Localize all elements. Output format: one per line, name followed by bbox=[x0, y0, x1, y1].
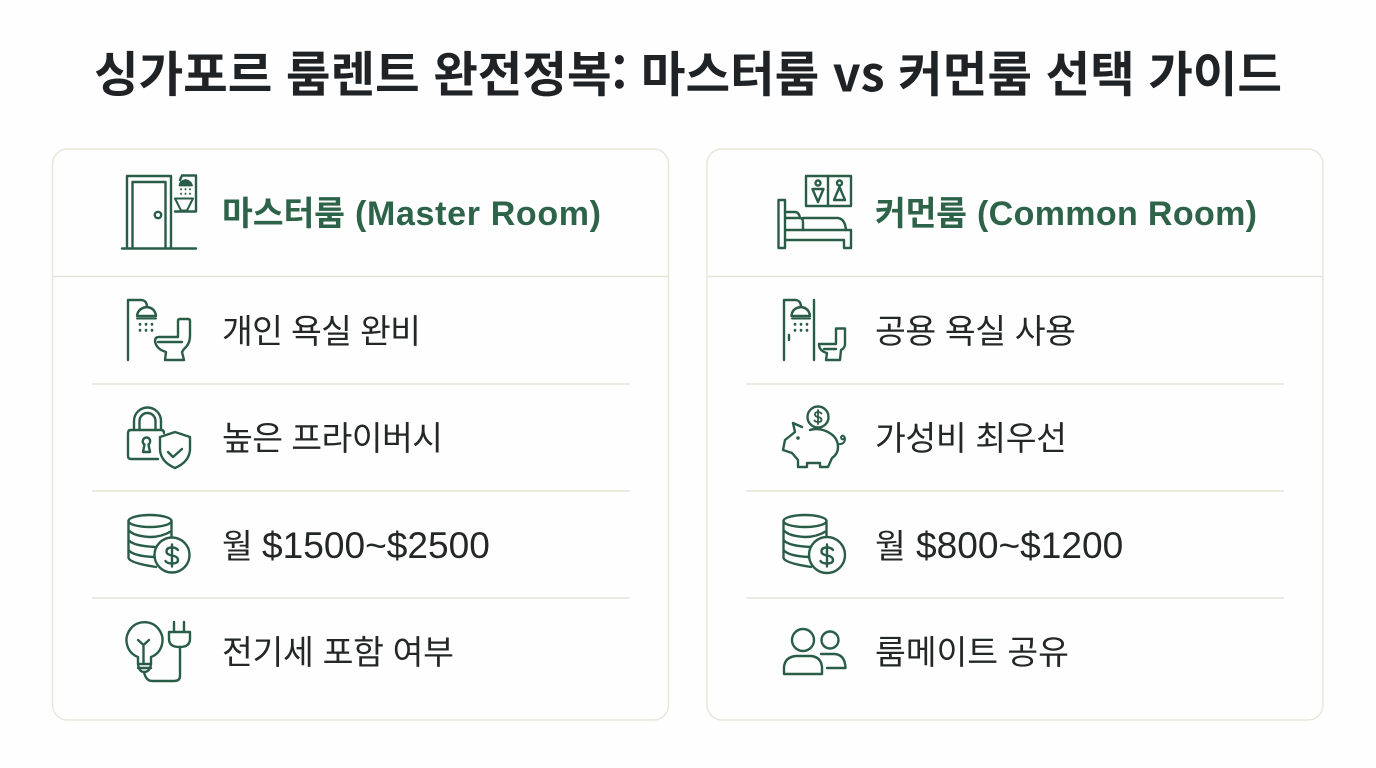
text: value for money: 가성비 최우선 bbox=[875, 411, 1067, 460]
icon: bed and shared toilet sign bbox=[778, 176, 851, 248]
text: high privacy: 높은 프라이버시 bbox=[222, 411, 443, 460]
heading: master room bbox=[222, 186, 601, 235]
text: roommate share: 룸메이트 공유 bbox=[875, 625, 1069, 674]
panel: common room bbox=[707, 149, 1323, 720]
heading: master room: 마스터룸 bbox=[222, 186, 345, 235]
text: common rent: $800~$1200 bbox=[916, 524, 1123, 566]
text: shared bathroom: 공용 욕실 사용 bbox=[875, 304, 1076, 353]
icon: lock and shield bbox=[128, 408, 190, 468]
panel: master room bbox=[52, 149, 668, 720]
icon: door with bathroom bbox=[122, 176, 196, 248]
text: master rent: $1500~$2500 bbox=[262, 524, 490, 566]
icon: private bathroom bbox=[128, 300, 190, 360]
icon: light bulb and plug bbox=[126, 622, 190, 681]
icon: roommates bbox=[784, 629, 846, 674]
text: electricity: 전기세 포함 여부 bbox=[222, 625, 454, 674]
text: master rent: 월 bbox=[222, 519, 253, 568]
title: 싱가포르 룸렌트 완전정복: 마스터룸 vs 커먼룸 선택 가이드 bbox=[94, 36, 1282, 106]
icon: shared bathroom bbox=[784, 300, 845, 360]
text: common rent: 월 bbox=[875, 519, 906, 568]
heading: common room: 커먼룸 bbox=[875, 186, 967, 235]
icon: coins bbox=[784, 515, 845, 573]
heading: common room: (Common Room) bbox=[977, 195, 1257, 233]
icon: piggy bank bbox=[783, 406, 845, 467]
icon: coins bbox=[128, 515, 190, 572]
heading: common room bbox=[875, 186, 1257, 235]
text: private bathroom: 개인 욕실 완비 bbox=[222, 304, 421, 353]
heading: master room: (Master Room) bbox=[355, 195, 601, 233]
